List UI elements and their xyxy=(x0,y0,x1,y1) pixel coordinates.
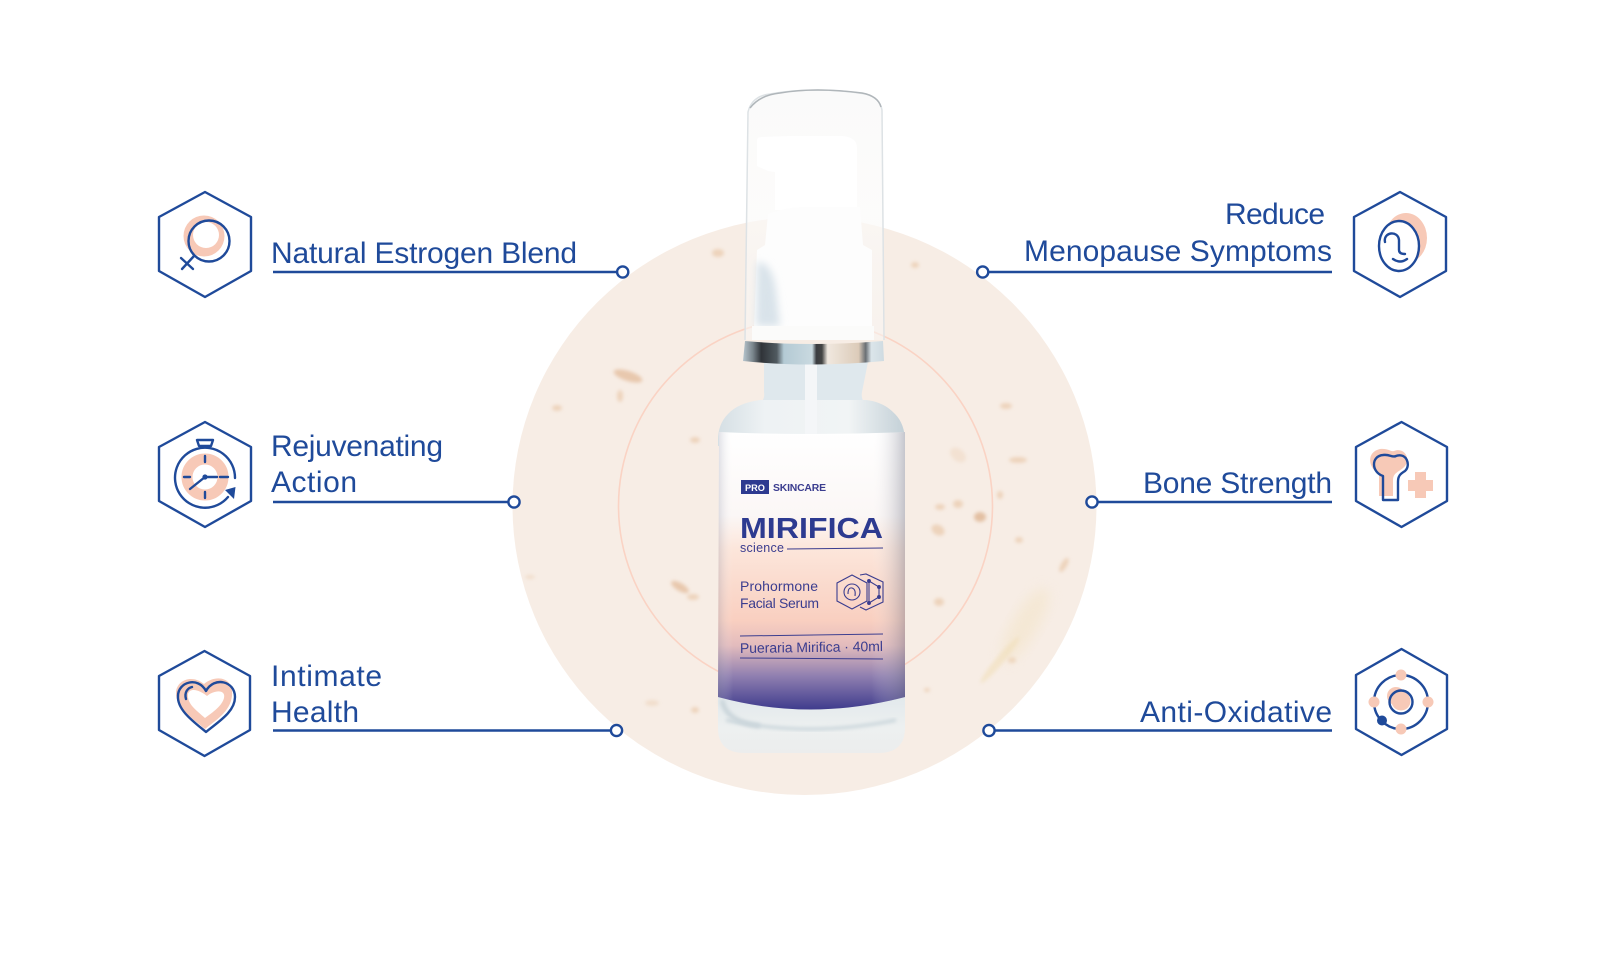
label: Natural Estrogen Blend xyxy=(271,237,577,270)
science tagline: science xyxy=(740,541,784,555)
label xyxy=(271,660,382,729)
product name: MIRIFICA xyxy=(740,513,883,545)
silver collar xyxy=(743,341,884,364)
icon: atom xyxy=(1356,649,1447,755)
icon: stopwatch xyxy=(159,422,251,527)
icon: bone and plus xyxy=(1356,422,1447,527)
item: intimate health xyxy=(159,651,622,756)
connector xyxy=(273,266,628,278)
label xyxy=(1024,198,1332,268)
brand tag: PRO xyxy=(745,483,765,493)
connector xyxy=(1086,496,1332,508)
brand tag xyxy=(741,480,826,494)
pump xyxy=(752,136,874,340)
item: rejuvenating action xyxy=(159,422,520,527)
product description xyxy=(740,578,819,611)
icon: female symbol xyxy=(159,192,251,297)
inner ring xyxy=(618,319,992,693)
marble disc xyxy=(512,217,1096,795)
serum bottle xyxy=(718,90,905,753)
bottle neck xyxy=(752,362,872,410)
label: Bone Strength xyxy=(1143,467,1332,500)
label xyxy=(271,430,443,499)
product description: Facial Serum xyxy=(740,595,819,611)
item: anti-oxidative xyxy=(983,649,1447,755)
connector xyxy=(273,496,520,508)
icon: heart xyxy=(159,651,250,756)
label: Reduce xyxy=(1225,198,1325,231)
clear cap xyxy=(745,90,884,340)
dosage text: Pueraria Mirifica · 40ml xyxy=(740,638,883,656)
serum label xyxy=(718,432,905,710)
brand tag: SKINCARE xyxy=(773,483,826,494)
label: Intimate xyxy=(271,660,382,693)
icon: face xyxy=(1354,192,1446,297)
bottle base xyxy=(718,690,905,753)
label: Health xyxy=(271,696,359,729)
connector xyxy=(977,266,1332,278)
label: Rejuvenating xyxy=(271,430,443,463)
bottle shoulders xyxy=(718,400,905,446)
connector xyxy=(273,725,622,736)
label: Anti-Oxidative xyxy=(1140,696,1332,729)
cap outline xyxy=(745,90,884,340)
item: natural estrogen blend xyxy=(159,192,628,297)
item: reduce menopause symptoms xyxy=(977,192,1446,297)
label: Action xyxy=(271,466,357,499)
connector xyxy=(983,725,1332,736)
product description: Prohormone xyxy=(740,578,818,594)
item: bone strength xyxy=(1086,422,1447,527)
label: Menopause Symptoms xyxy=(1024,235,1332,268)
icon: molecule xyxy=(837,574,883,610)
